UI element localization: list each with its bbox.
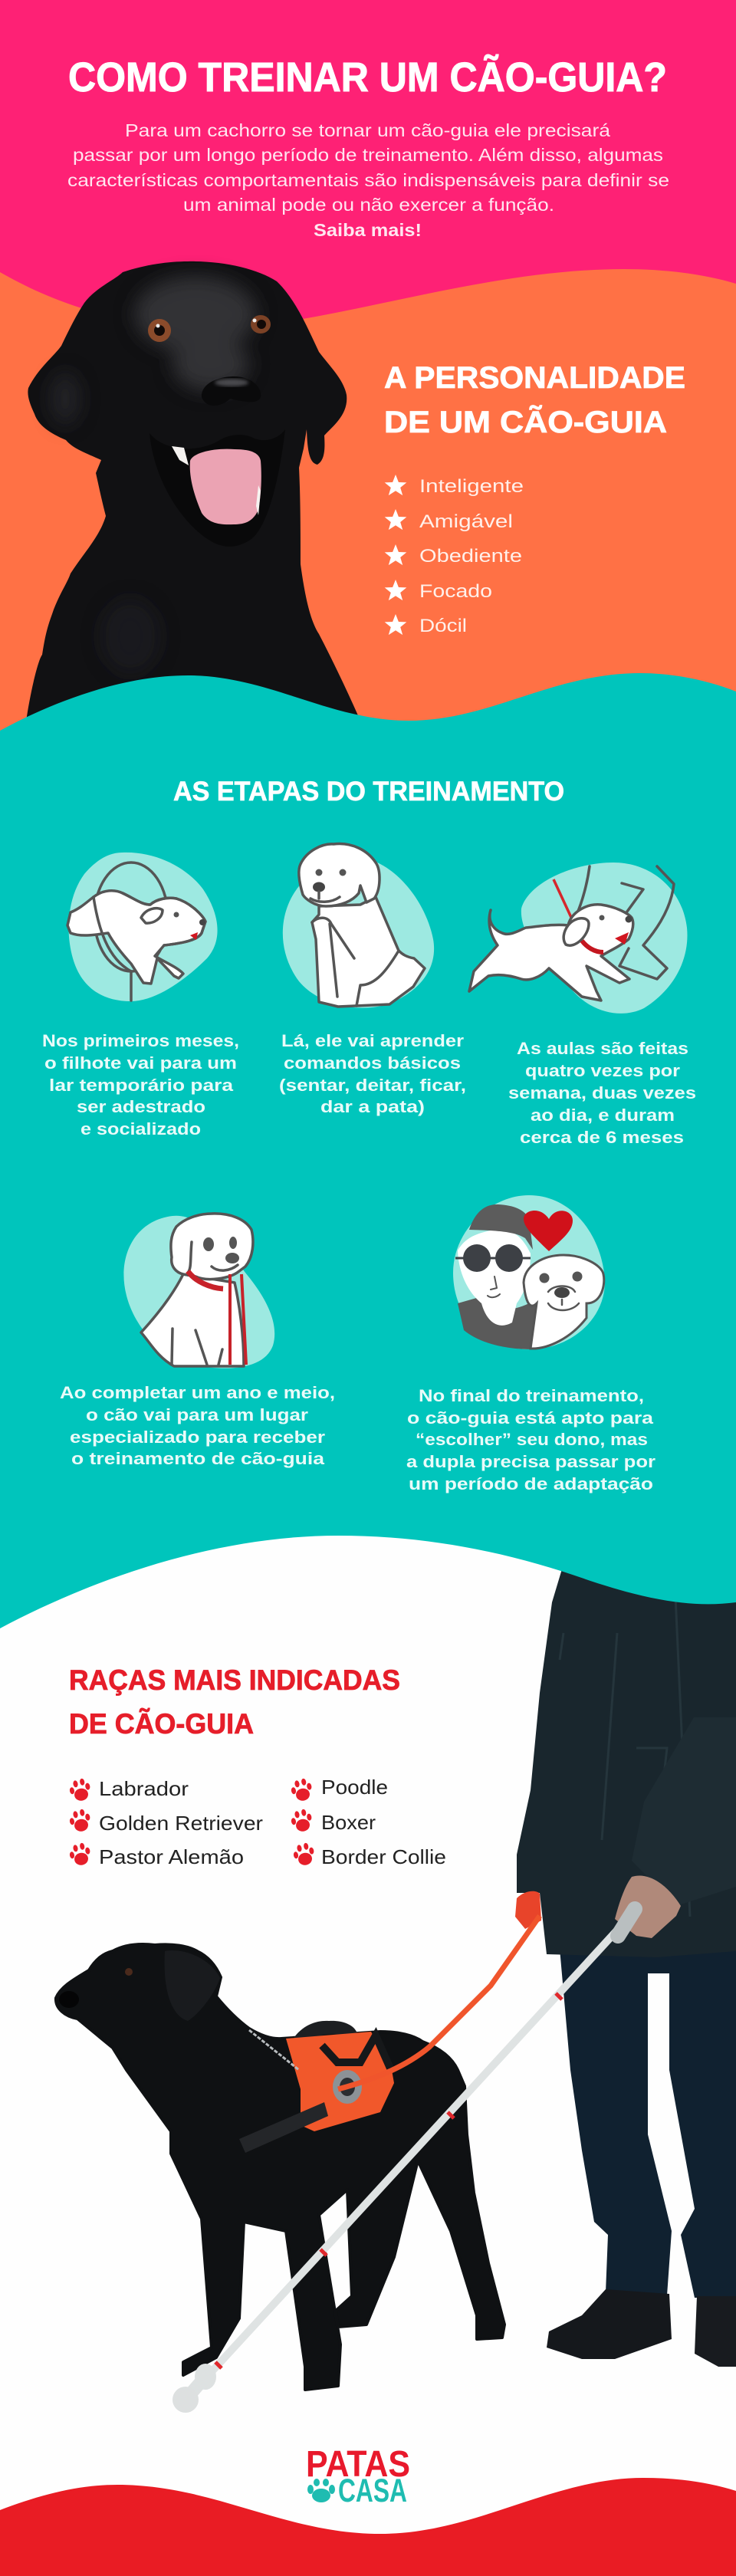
white cane [172,1909,635,2413]
heading: breeds: RAÇAS MAIS INDICADAS [69,1664,400,1696]
panel: pink header background [0,0,736,337]
badge [333,2070,362,2104]
step 5 text: o cão-guia está apto para [407,1408,654,1428]
icon: tongue [190,449,261,524]
icon: nose [202,376,261,406]
ear [165,1950,220,2021]
step 2 text: comandos básicos [284,1053,461,1073]
icon: left eye [148,319,171,342]
harness handle [293,2021,360,2066]
step 4 text [60,1383,335,1468]
list: personality traits: Focado [419,581,492,602]
step 5 text [406,1386,656,1493]
panel: orange personality background [0,269,736,767]
step 2 text: Lá, ele vai aprender [281,1031,464,1050]
list: recommended breeds: Pastor Alemão [99,1845,244,1868]
harness vest [286,2032,394,2131]
step 4 text: o cão vai para um lugar [86,1405,308,1424]
list: recommended breeds: Golden Retriever [99,1812,263,1835]
step 1 text: e socializado [80,1119,201,1138]
list: personality traits: Obediente [419,546,522,567]
dog [524,1255,604,1349]
icon: star [385,544,406,565]
icon: paw [290,1777,314,1802]
harness strap [239,2102,328,2153]
icon: paw [68,1842,92,1867]
step 3: illustration dog walking beside person [469,863,688,1014]
step 2 text: (sentar, deitar, ficar, [279,1076,466,1095]
eye [125,1968,133,1976]
step 5 text: a dupla precisa passar por [406,1452,656,1471]
logo: Patas da Casa [306,2444,410,2509]
heading: personality: DE UM CÃO-GUIA [384,404,667,439]
icon: teal paw [307,2479,335,2502]
photo: person with coat, trousers and boots [515,1564,736,2367]
heading: breeds [69,1664,400,1740]
icon: paw [292,1842,316,1867]
right boot [695,2296,736,2367]
step 3 text: ao dia, e duram [531,1106,675,1125]
icon: heart [524,1211,573,1251]
nose [59,1991,79,2008]
fur highlights [50,276,257,675]
left hand with leash grip [515,1891,541,1929]
list: recommended breeds [68,1776,446,1868]
step 1 text: Nos primeiros meses, [42,1031,239,1050]
step 3 text: quatro vezes por [525,1061,680,1080]
intro text block: Saiba mais! [314,220,422,240]
photo: black labrador portrait [26,261,360,736]
heading: breeds: DE CÃO-GUIA [69,1707,254,1740]
list: recommended breeds: Border Collie [321,1845,446,1868]
leash [338,1916,540,2089]
logo: Patas da Casa: CASA [338,2472,407,2509]
icon: star [385,614,406,635]
step 2 text: dar a pata) [320,1097,425,1116]
list: personality traits: Dócil [419,616,467,636]
step 4 text: Ao completar um ano e meio, [60,1383,335,1402]
step 4 text: o treinamento de cão-guia [71,1449,325,1468]
coat [517,1564,736,1957]
man cap [469,1204,533,1250]
intro text block [67,120,669,240]
icon: paw [68,1808,92,1833]
step 1: illustration dog jumping through hoop [67,853,218,1001]
icon: paw [290,1808,314,1833]
mouth [150,429,285,547]
icon: right eye [251,315,271,334]
title: COMO TREINAR UM CÃO-GUIA? [68,54,667,100]
footer red wave [0,2478,736,2576]
step 3 text: As aulas são feitas [517,1039,688,1058]
step 5 text: No final do treinamento, [419,1386,644,1405]
intro text block: características comportamentais são indispensáveis para definir se [67,170,669,190]
list: personality traits: Inteligente [419,476,524,497]
list: recommended breeds: Labrador [99,1777,189,1800]
step 3 text: semana, duas vezes [508,1083,696,1102]
intro text block: um animal pode ou não exercer a função. [183,195,554,215]
step 5 text: um período de adaptação [409,1474,653,1493]
icon: star [385,580,406,600]
trousers [559,1940,736,2298]
intro text block: Para um cachorro se tornar um cão-guia ele precisará [125,120,610,140]
list: recommended breeds: Boxer [321,1811,376,1834]
man shirt [458,1297,540,1349]
intro text block: passar por um longo período de treinamento. Além disso, algumas [73,145,663,165]
step 1 text: ser adestrado [77,1097,205,1116]
step 2: illustration dog giving paw [283,844,434,1008]
step 1 text: lar temporário para [49,1076,234,1095]
step 4 text: especializado para receber [70,1428,325,1447]
photo: black guide dog with orange harness [56,1944,504,2390]
step 4: illustration dog holding leash [123,1214,274,1368]
chain [249,2030,299,2070]
step 5: illustration man with sunglasses and dog [453,1195,605,1349]
hand [615,1875,681,1938]
icon: star [385,509,406,530]
step 3 text [508,1039,696,1147]
step 1 text [42,1031,239,1138]
step 2 text [279,1031,466,1116]
panel: teal training section background [0,673,736,1628]
step 1 text: o filhote vai para um [44,1053,237,1073]
heading: personality [384,361,685,439]
icon: star [385,475,406,495]
icon: paw [68,1777,92,1802]
heading: training stages: AS ETAPAS DO TREINAMENTO [173,777,564,807]
step 3 text: cerca de 6 meses [520,1128,684,1147]
heading: personality: A PERSONALIDADE [384,361,685,395]
left boot [547,2289,672,2359]
logo: Patas da Casa: PATAS [306,2444,410,2485]
step 5 text: “escolher” seu dono, mas [416,1430,648,1449]
list: personality traits: Amigável [419,511,513,532]
man face [458,1230,531,1326]
list: recommended breeds: Poodle [321,1776,388,1799]
right sleeve [632,1717,736,1906]
icon: teeth [172,446,261,515]
sunglasses [455,1244,531,1272]
list: personality traits [385,475,524,636]
